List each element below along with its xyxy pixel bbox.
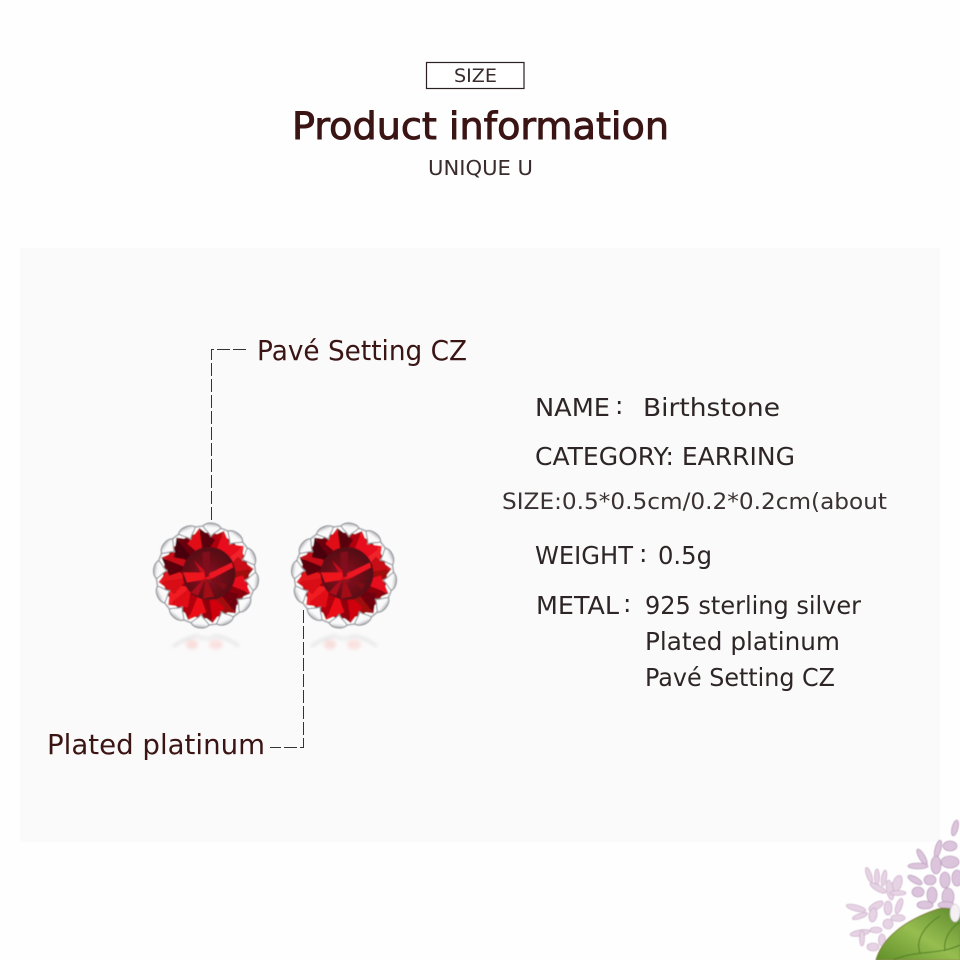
spec: name: Birthstone	[643, 393, 780, 422]
badge: SIZE	[426, 62, 524, 88]
lilac cluster: right	[907, 819, 960, 909]
spec: name: NAME	[535, 393, 610, 422]
spec: metal	[536, 589, 862, 692]
callout: Plated platinum: Plated platinum	[47, 728, 265, 761]
icon: right red stud earring	[291, 522, 397, 650]
callout: Pavé Setting CZ	[212, 334, 467, 520]
spec: name	[535, 391, 780, 422]
callout: Plated platinum	[47, 610, 304, 761]
white blossom	[950, 904, 960, 922]
title: Product information	[292, 105, 669, 148]
spec: name: :	[615, 391, 623, 420]
leaf veins	[893, 916, 960, 960]
spec: metal: 925 sterling silver	[645, 591, 862, 620]
spec: weight: 0.5g	[658, 541, 712, 570]
spec: weight: WEIGHT	[535, 541, 634, 570]
subtitle: UNIQUE U	[428, 156, 533, 180]
green leaf	[876, 908, 960, 960]
spec: metal: :	[623, 589, 631, 618]
spec: weight	[535, 539, 712, 570]
spec: size: SIZE:0.5*0.5cm/0.2*0.2cm(about	[502, 490, 887, 515]
spec: metal: METAL	[536, 591, 619, 620]
callout: Pavé Setting CZ: Pavé Setting CZ	[257, 334, 467, 367]
illustration: lilac flowers and leaf	[846, 819, 960, 960]
icon: left red stud earring	[153, 522, 259, 650]
spec: metal: Plated platinum	[645, 627, 840, 656]
panel: product details background	[20, 248, 940, 842]
lilac cluster: left	[846, 867, 906, 951]
spec: weight: :	[639, 539, 647, 568]
badge: SIZE: SIZE	[454, 65, 497, 87]
spec: category: CATEGORY: EARRING	[535, 442, 795, 471]
spec: metal: Pavé Setting CZ	[645, 663, 835, 692]
